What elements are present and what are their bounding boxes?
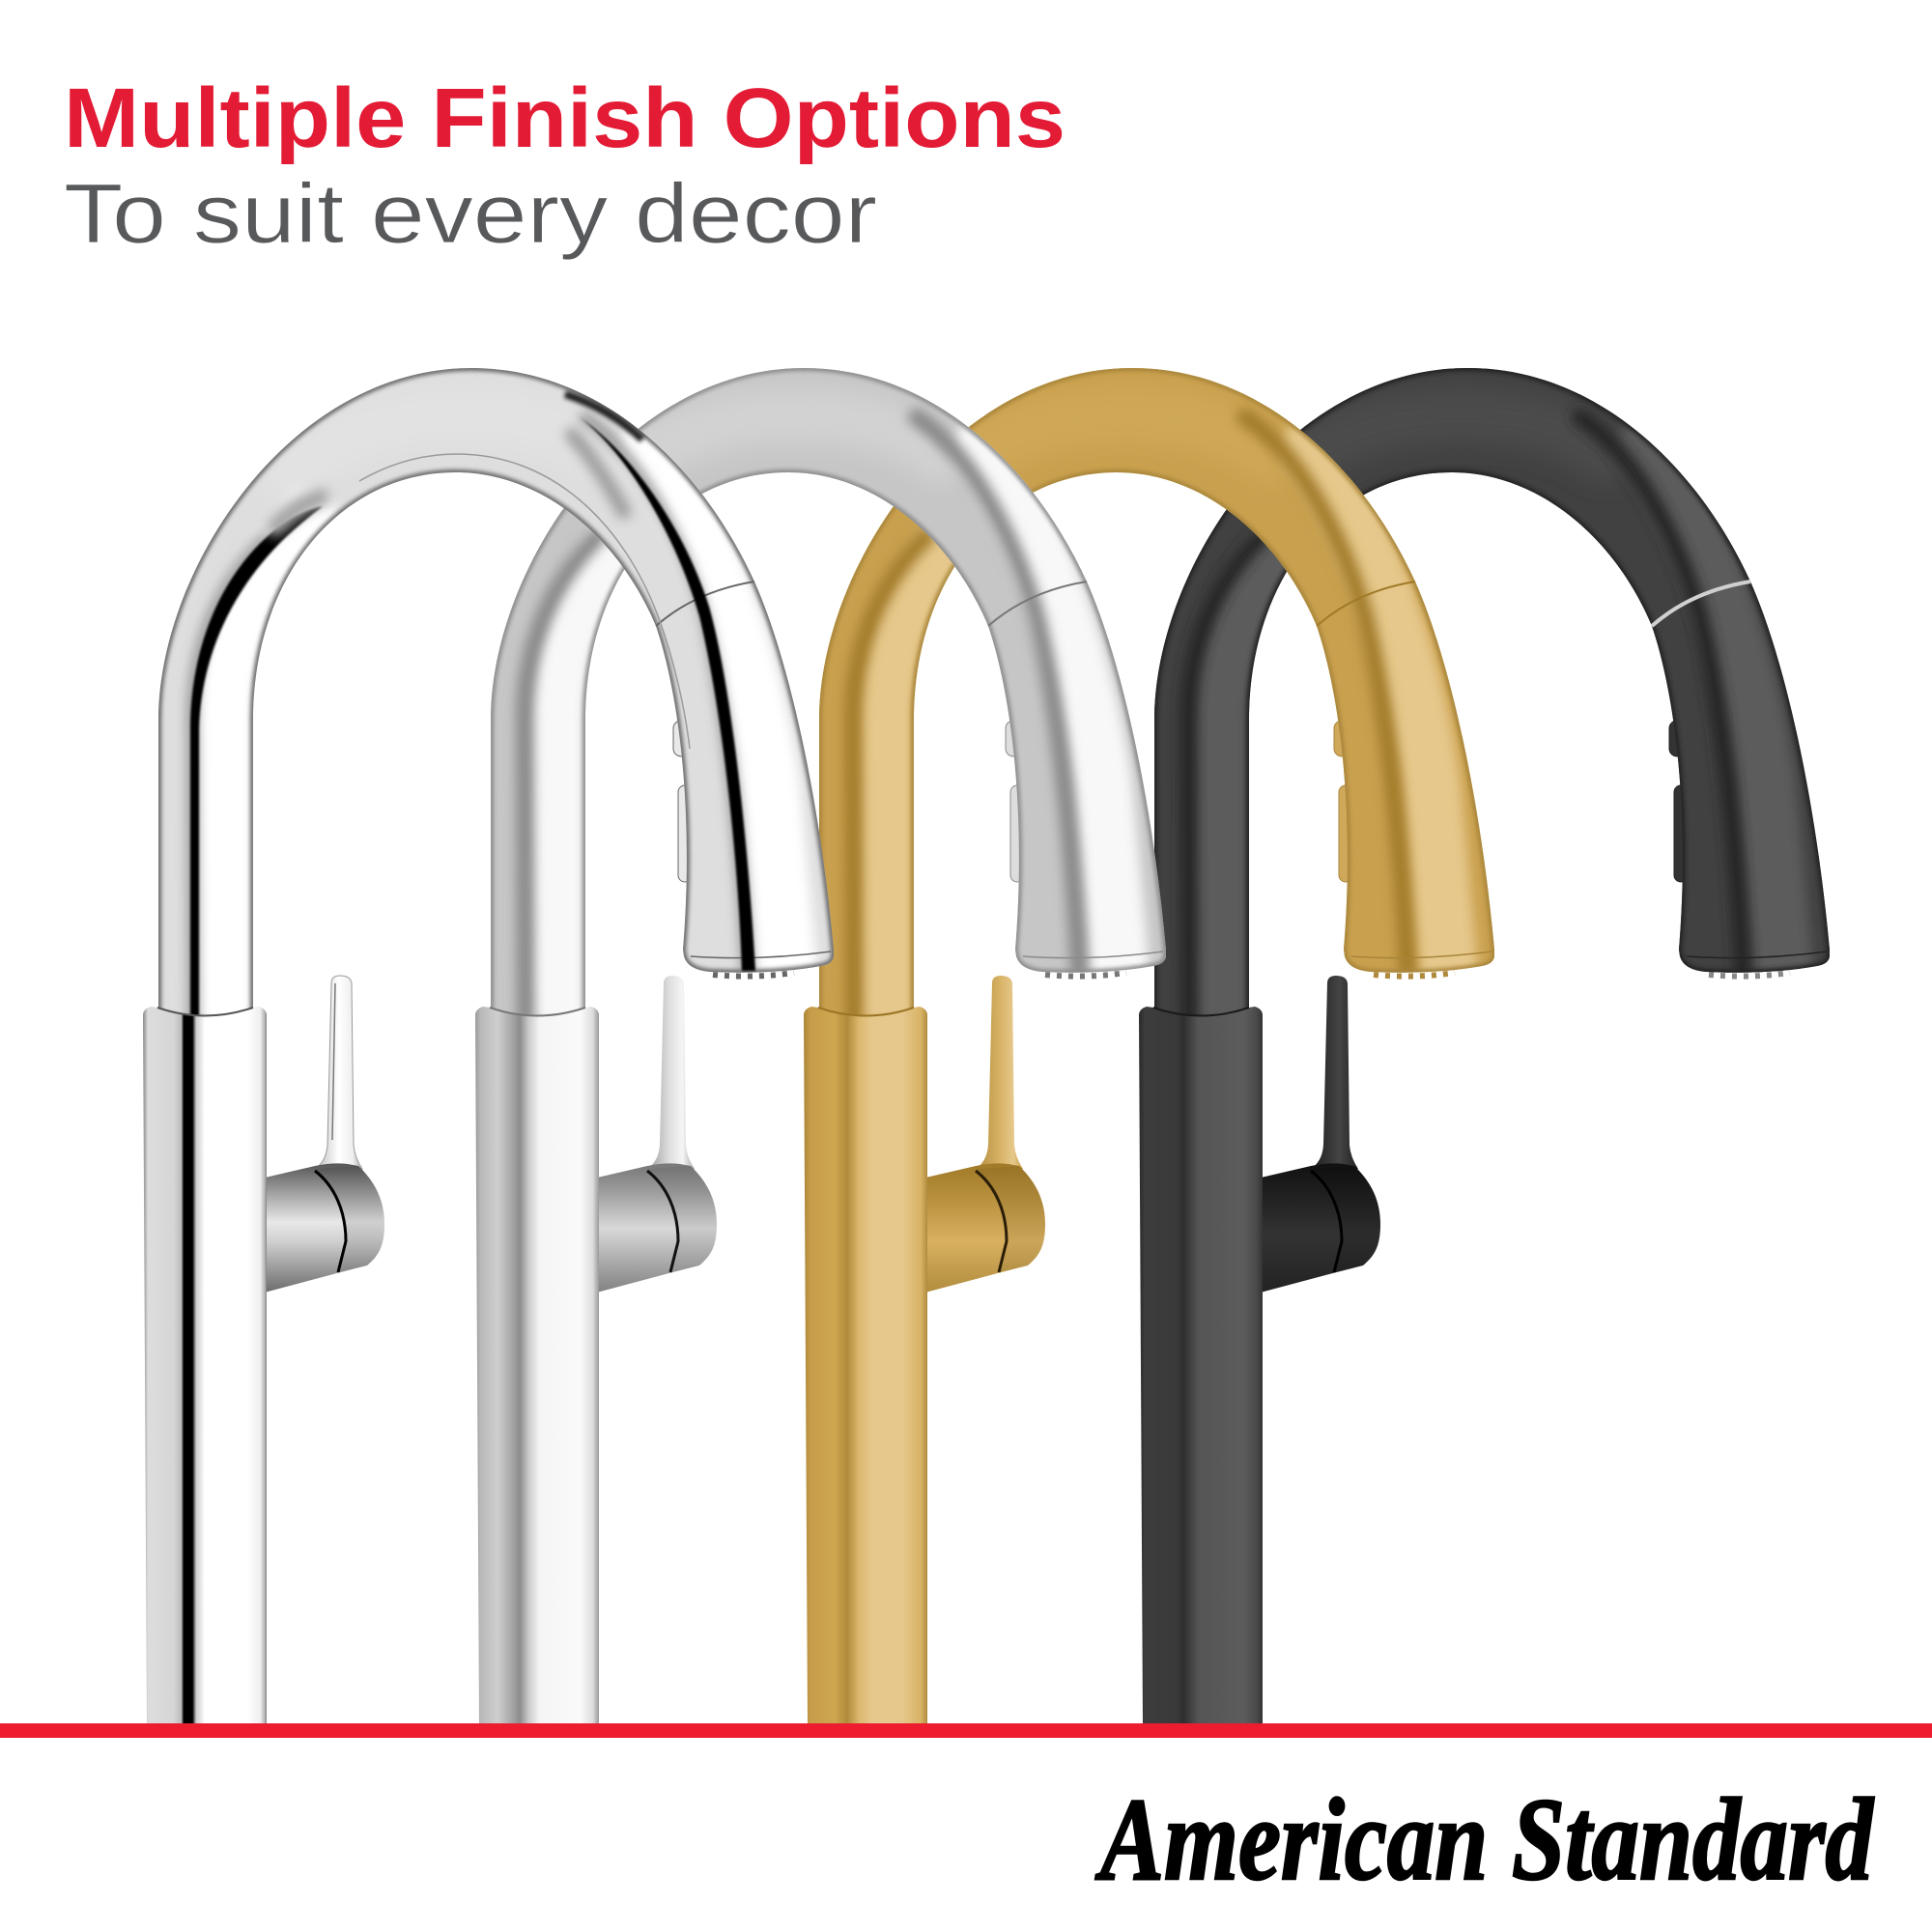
subtitle: To suit every decor xyxy=(64,167,877,261)
chrome spout xyxy=(158,368,834,1029)
nickel body column xyxy=(475,1007,599,1723)
black body column xyxy=(1139,1007,1263,1723)
faucet: brushed nickel finish xyxy=(475,368,1166,1723)
chrome body column xyxy=(143,1007,267,1723)
black lever handle xyxy=(1257,976,1380,1293)
faucet: matte black finish xyxy=(1139,368,1830,1723)
nickel spout xyxy=(491,368,1166,1029)
chrome lever handle xyxy=(261,976,384,1293)
nickel lever handle xyxy=(593,976,717,1293)
chrome reflections xyxy=(190,394,755,1024)
title: Multiple Finish Options xyxy=(64,71,1065,165)
gold lever handle xyxy=(922,976,1045,1293)
black spout xyxy=(1154,368,1830,1029)
faucet: brushed gold finish xyxy=(804,368,1494,1723)
faucet: polished chrome finish xyxy=(143,368,834,1723)
gold spout xyxy=(819,368,1494,1029)
red divider line xyxy=(0,1723,1932,1738)
gold body column xyxy=(804,1007,927,1723)
